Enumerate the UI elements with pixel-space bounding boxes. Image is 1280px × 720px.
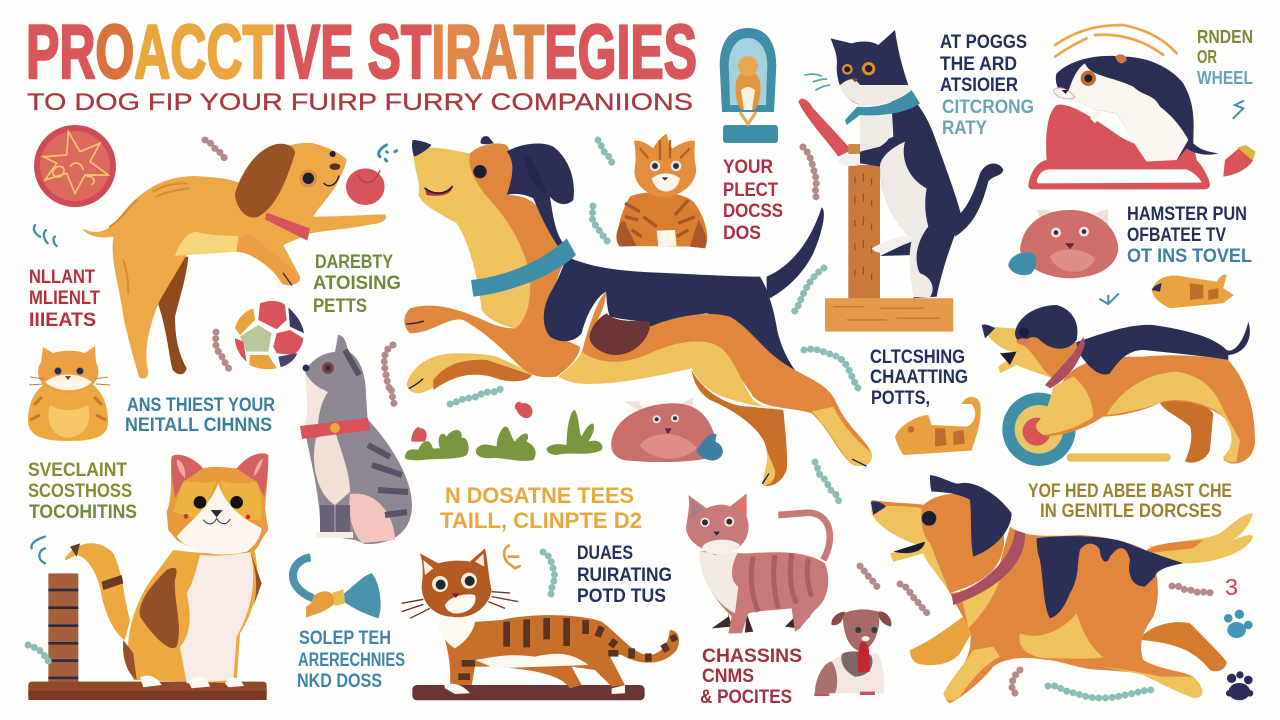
illustration: small hamster: [1152, 275, 1234, 308]
text: yof hed: [1028, 480, 1232, 522]
text: at pogs: [940, 31, 1034, 139]
text: at pogs: RATY: [942, 117, 987, 139]
text: at pogs: CITCRONG: [942, 96, 1034, 118]
text: specialist: [28, 459, 137, 523]
illustration: orange tabby sitting: [28, 346, 110, 441]
text: nilant treats: MLIENLT: [29, 287, 100, 309]
title: PROACCTIVE STIRATEGIES: [26, 10, 697, 95]
icon: strawberry: [1223, 145, 1256, 177]
text: dareity pets: [313, 251, 401, 317]
illustration: running orange dog: [871, 475, 1253, 703]
text: hamster pun: OFBATEE TV: [1127, 224, 1226, 246]
text: rnden or wheel: WHEEL: [1197, 68, 1253, 88]
text: n dosatne: TAILL, CLINPTE D2: [440, 508, 642, 533]
text: your plect: [723, 156, 783, 244]
text: chassins: CHASSINS: [702, 645, 802, 667]
illustration: main leaping dog: [404, 133, 872, 486]
subtitle: TO DOG FIP YOUR FUIRP FURRY COMPANIIONS: [27, 89, 693, 116]
icon: colourful soccer ball: [235, 301, 304, 369]
illustration: brown tabby cat: [402, 548, 679, 700]
illustration: grey cat with red collar: [300, 335, 412, 544]
text: duaes: [577, 542, 672, 607]
text: nilant treats: IIIEATS: [29, 309, 96, 331]
illustration: dogs lower right: [871, 305, 1255, 703]
icon: plants: [405, 402, 602, 461]
text: n dosatne: N DOSATNE TEES: [445, 483, 634, 508]
text: ans thiest: [125, 394, 275, 436]
text: hamster pun: [1127, 203, 1252, 267]
text: hamster pun: HAMSTER PUN: [1127, 203, 1247, 225]
text: your plect: DOS: [723, 222, 761, 244]
text: nilant treats: NLLANT: [29, 266, 95, 288]
illustration: hamster on wheel: [1028, 25, 1243, 189]
illustration: curled pink cat right: [1008, 208, 1118, 278]
icon: blue bow toy: [293, 557, 381, 618]
text: solep teh: ARERECHNIES: [298, 649, 405, 671]
illustration: yellow dog with ball: [34, 125, 397, 379]
text: clitching: POTTS,: [871, 387, 930, 409]
text: rnden or wheel: RNDEN: [1197, 27, 1253, 47]
illustration: pink striped cat: [686, 493, 830, 633]
text: dareity pets: DAREBTY: [315, 251, 393, 273]
illustration: calico cat on post: [28, 453, 268, 700]
text: solep teh: SOLEP TEH: [299, 627, 391, 649]
text: chassins: & POCITES: [700, 686, 792, 708]
text: chassins: CNMS: [702, 665, 754, 687]
illustration: cat, hamster and pink cat upper right: [798, 25, 1256, 332]
text: dareity pets: ATOISING: [313, 272, 401, 294]
icon: red kibble ball: [34, 125, 116, 207]
illustration: curled pink cat: [611, 400, 723, 462]
text: your plect: DOCSS: [723, 200, 783, 222]
text: n dosatne: [440, 483, 642, 533]
text: rnden or wheel: OR: [1197, 47, 1217, 67]
text: rnden or wheel: [1197, 27, 1253, 88]
text: at pogs: THE ARD: [940, 53, 1017, 75]
text: duaes: RUIRATING: [577, 564, 672, 586]
icon: hamster tube: [720, 28, 778, 143]
icon: number mark: 3: [1225, 574, 1238, 600]
text: clitching: CLTCSHING: [870, 346, 965, 368]
text: yof hed: YOF HED ABEE BAST CHE: [1028, 480, 1232, 502]
text: specialist: TOCOHITINS: [29, 501, 137, 523]
illustration: small brown puppy: [814, 609, 891, 696]
icon: red toy ball: [346, 168, 385, 205]
text: solep teh: NKD DOSS: [297, 670, 382, 692]
text: clitching: CHAATTING: [870, 366, 968, 388]
text: duaes: POTD TUS: [577, 585, 666, 607]
text: your plect: YOUR: [723, 156, 773, 178]
text: hamster pun: OT INS TOVEL: [1127, 245, 1252, 267]
illustration: cat on scratching post: [798, 30, 1003, 332]
text: ans thiest: ANS THIEST YOUR: [127, 394, 275, 416]
illustration: orange tabby cat facing front: [616, 133, 707, 248]
text: clitching: [870, 346, 968, 409]
text: solep teh: [297, 627, 405, 692]
text: specialist: SVECLAINT: [28, 459, 127, 481]
text: specialist: SCOSTHOSS: [28, 480, 132, 502]
text: chassins: [700, 645, 802, 708]
text: at pogs: AT POGGS: [940, 31, 1027, 53]
text: ans thiest: NEITALL CIHNNS: [125, 414, 272, 436]
illustration: cats lower centre: [402, 493, 891, 700]
text: nilant treats: [29, 266, 100, 331]
text: dareity pets: PETTS: [313, 295, 367, 317]
text: yof hed: IN GENITLE DORCSES: [1040, 500, 1222, 522]
text: duaes: DUAES: [577, 542, 633, 564]
icon: navy paw: [1226, 671, 1253, 700]
illustration: small tabby cat: [895, 397, 981, 455]
text: your plect: PLECT: [723, 179, 778, 201]
illustration: dog on wheel: [871, 305, 1255, 703]
icon: blue paw: [1224, 610, 1253, 638]
text: at pogs: ATSIOIER: [940, 74, 1018, 96]
